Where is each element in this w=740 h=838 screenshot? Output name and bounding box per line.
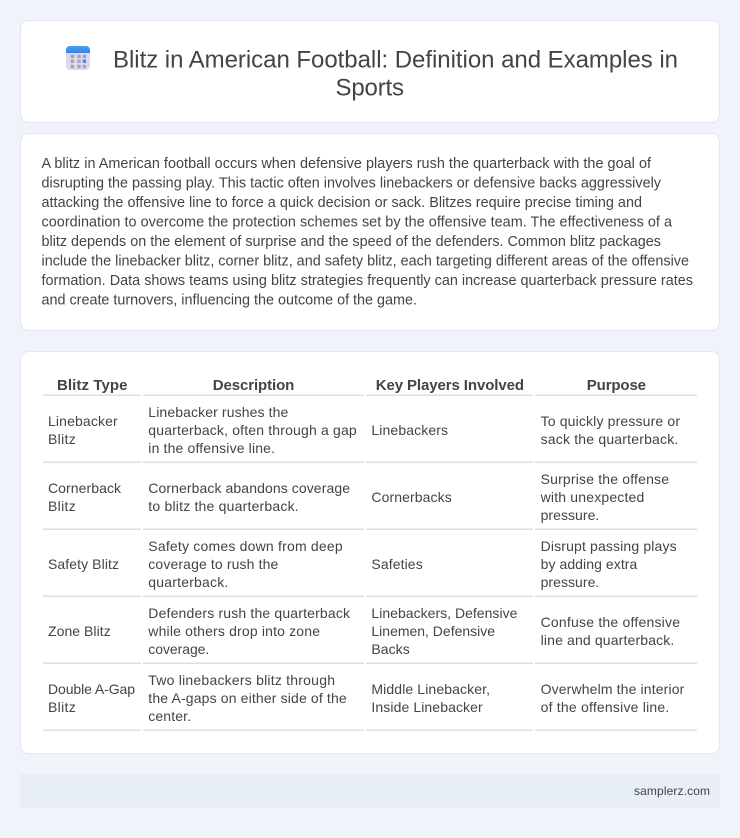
table row: zone blitz: Linemen, Defensive bbox=[371, 623, 495, 639]
table row: cornerback blitz: Blitz bbox=[48, 498, 76, 514]
table row: linebacker blitz: To quickly pressure or bbox=[541, 413, 680, 429]
table row: safety blitz: Safety comes down from deep bbox=[148, 538, 343, 554]
panel: introduction paragraph: and create turnovers, influencing the outcome of the game. bbox=[42, 292, 417, 308]
table row: cornerback blitz: to blitz the quarterback. bbox=[148, 498, 299, 514]
table row: double A-gap blitz: Overwhelm the interior bbox=[541, 681, 685, 697]
table row: linebacker blitz: Linebacker bbox=[48, 413, 118, 429]
table header row: Purpose bbox=[587, 377, 646, 394]
table row: linebacker blitz: Linebacker rushes the bbox=[148, 404, 289, 420]
table row: zone blitz bbox=[48, 605, 680, 657]
table row: zone blitz: Defenders rush the quarterback bbox=[148, 605, 351, 621]
table row: double A-gap blitz: Two linebackers blitz through bbox=[148, 672, 335, 688]
table row: cornerback blitz: Cornerback bbox=[48, 480, 122, 496]
table row: safety blitz: by adding extra bbox=[541, 556, 638, 572]
table row: double A-gap blitz: center. bbox=[148, 708, 191, 724]
table row: zone blitz: Linebackers, Defensive bbox=[371, 605, 518, 621]
title bbox=[113, 46, 678, 102]
table row: zone blitz: Zone Blitz bbox=[48, 623, 111, 639]
table row: cornerback blitz: Cornerbacks bbox=[371, 489, 452, 505]
panel: introduction paragraph bbox=[20, 134, 720, 330]
title: Blitz in American Football: Definition and Examples in bbox=[113, 46, 678, 74]
panel: introduction paragraph: include the linebacker blitz, corner blitz, and safety blitz, each targeting different areas of the offensive bbox=[42, 254, 689, 270]
table row: double A-gap blitz: of the offensive line. bbox=[541, 699, 669, 715]
panel: blitz types table bbox=[20, 352, 720, 754]
table row: double A-gap blitz: Inside Linebacker bbox=[371, 699, 483, 715]
table row: cornerback blitz: with unexpected bbox=[540, 489, 644, 505]
panel: introduction paragraph: attacking the offensive line to force a quick decision or sack. Blitzes require precise timing and bbox=[42, 195, 642, 211]
table row: linebacker blitz bbox=[48, 404, 680, 456]
table row: safety blitz: coverage to rush the bbox=[148, 556, 279, 572]
table row: double A-gap blitz: Double A-Gap bbox=[48, 681, 135, 697]
table row: safety blitz: pressure. bbox=[541, 574, 599, 590]
table row: safety blitz: quarterback. bbox=[148, 574, 228, 590]
table row: cornerback blitz: Surprise the offense bbox=[541, 471, 669, 487]
table row: linebacker blitz: quarterback, often through a gap bbox=[148, 422, 357, 438]
table row: safety blitz: Disrupt passing plays bbox=[541, 538, 677, 554]
table row: linebacker blitz: sack the quarterback. bbox=[541, 431, 678, 447]
title: Sports bbox=[336, 74, 404, 102]
table row: cornerback blitz: Cornerback abandons coverage bbox=[148, 480, 350, 496]
table row: cornerback blitz: pressure. bbox=[541, 507, 599, 523]
panel: introduction paragraph: formation. Data shows teams using blitz strategies frequently can increase quarterback pressure rates bbox=[42, 273, 693, 289]
table row: linebacker blitz: Blitz bbox=[48, 431, 76, 447]
panel: title card bbox=[20, 20, 720, 122]
table row: safety blitz: Safety Blitz bbox=[48, 556, 119, 572]
table row: zone blitz: Confuse the offensive bbox=[541, 614, 680, 630]
table header row: Key Players Involved bbox=[376, 377, 524, 394]
icon: calendar bbox=[66, 46, 90, 70]
table row: cornerback blitz bbox=[48, 471, 669, 523]
table row: zone blitz: Backs bbox=[371, 641, 410, 657]
table row: zone blitz: while others drop into zone bbox=[147, 623, 320, 639]
table row: safety blitz bbox=[48, 538, 677, 590]
table row: safety blitz: Safeties bbox=[371, 556, 423, 572]
panel: introduction paragraph: A blitz in American football occurs when defensive players rush the quarterback with the goal of bbox=[42, 156, 652, 172]
table row: double A-gap blitz: Blitz bbox=[48, 699, 76, 715]
footer source text: samplerz.com bbox=[634, 784, 710, 798]
table row: linebacker blitz: in the offensive line. bbox=[148, 440, 275, 456]
table row: double A-gap blitz bbox=[48, 672, 685, 724]
table row: zone blitz: line and quarterback. bbox=[541, 632, 674, 648]
table header row bbox=[57, 377, 646, 394]
table row: zone blitz: coverage. bbox=[148, 641, 209, 657]
footer bar bbox=[20, 774, 720, 808]
table header row: Description bbox=[213, 377, 294, 394]
table header row: Blitz Type bbox=[57, 377, 128, 394]
panel: introduction paragraph: blitz depends on the element of surprise and the speed of the defenders. Common blitz packages bbox=[42, 234, 661, 250]
panel: introduction paragraph: disrupting the passing play. This tactic often involves linebackers or defensive backs aggressively bbox=[42, 176, 662, 192]
table row: double A-gap blitz: the A-gaps on either side of the bbox=[148, 690, 347, 706]
panel: introduction paragraph: coordination to overcome the protection schemes set by the offensive team. The effectiveness of a bbox=[42, 214, 672, 230]
table row: linebacker blitz: Linebackers bbox=[371, 422, 448, 438]
table row: double A-gap blitz: Middle Linebacker, bbox=[371, 681, 490, 697]
